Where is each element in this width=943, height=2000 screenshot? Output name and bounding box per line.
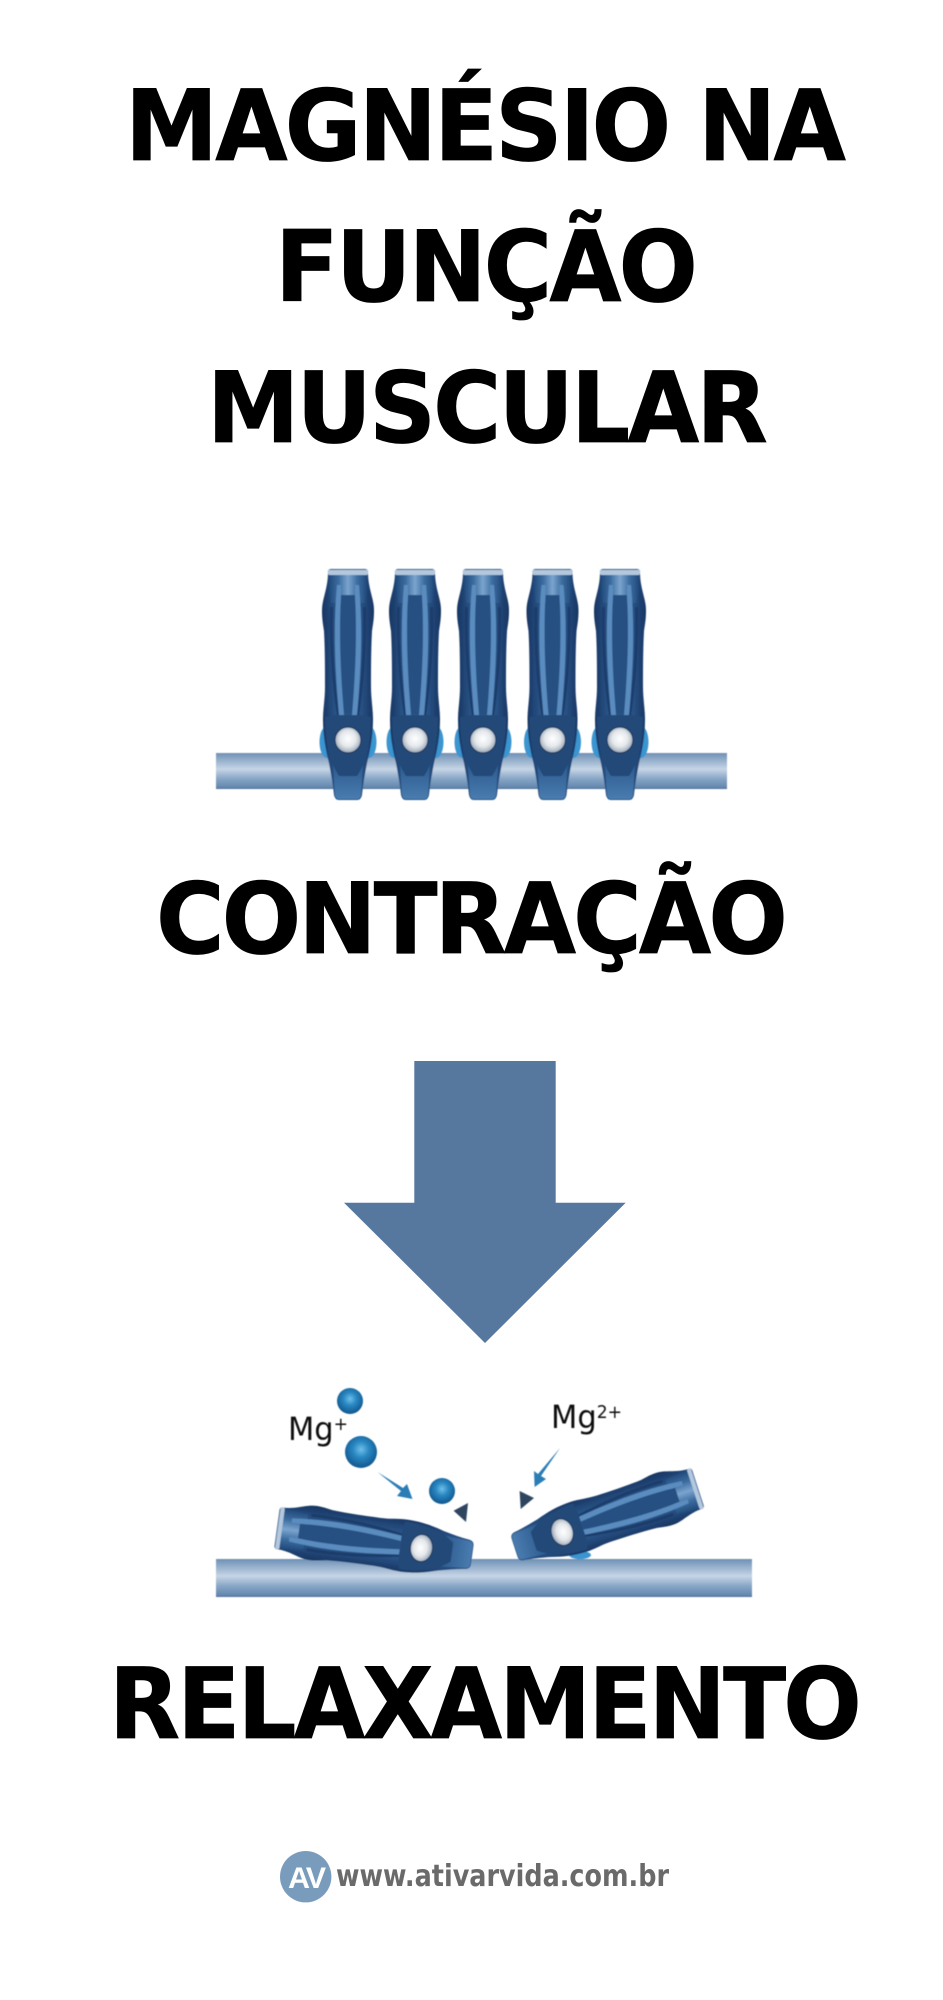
footer url: www.ativarvida.com.br (336, 1859, 669, 1894)
myosin heads upright (320, 569, 648, 800)
binding glow (393, 1551, 591, 1572)
heading: contraction: CONTRAÇÃO (156, 861, 785, 977)
illustration: contraction (216, 569, 727, 800)
title (125, 69, 846, 466)
illustration: relaxation (216, 1388, 752, 1597)
label Mg+: + (334, 1414, 348, 1435)
label Mg2+: 2+ (597, 1402, 622, 1423)
muscle filament bar (216, 753, 727, 789)
myosin head left (273, 1501, 476, 1582)
title: FUNÇÃO (275, 209, 695, 325)
muscle filament bar (216, 1559, 752, 1597)
myosin head right (506, 1462, 706, 1574)
label Mg+: Mg (288, 1410, 336, 1448)
footer logo (280, 1851, 331, 1902)
heading: relaxation: RELAXAMENTO (109, 1648, 859, 1762)
arrow to left head (378, 1472, 412, 1499)
label Mg2+: Mg (551, 1398, 599, 1436)
arrow down (344, 1061, 626, 1343)
title: MAGNÉSIO NA (125, 69, 846, 184)
magnesium ions (337, 1388, 455, 1504)
footer logo: AV (288, 1862, 326, 1895)
title: MUSCULAR (207, 352, 766, 466)
binding triangles (454, 1491, 534, 1522)
arrow to right head (534, 1448, 560, 1487)
